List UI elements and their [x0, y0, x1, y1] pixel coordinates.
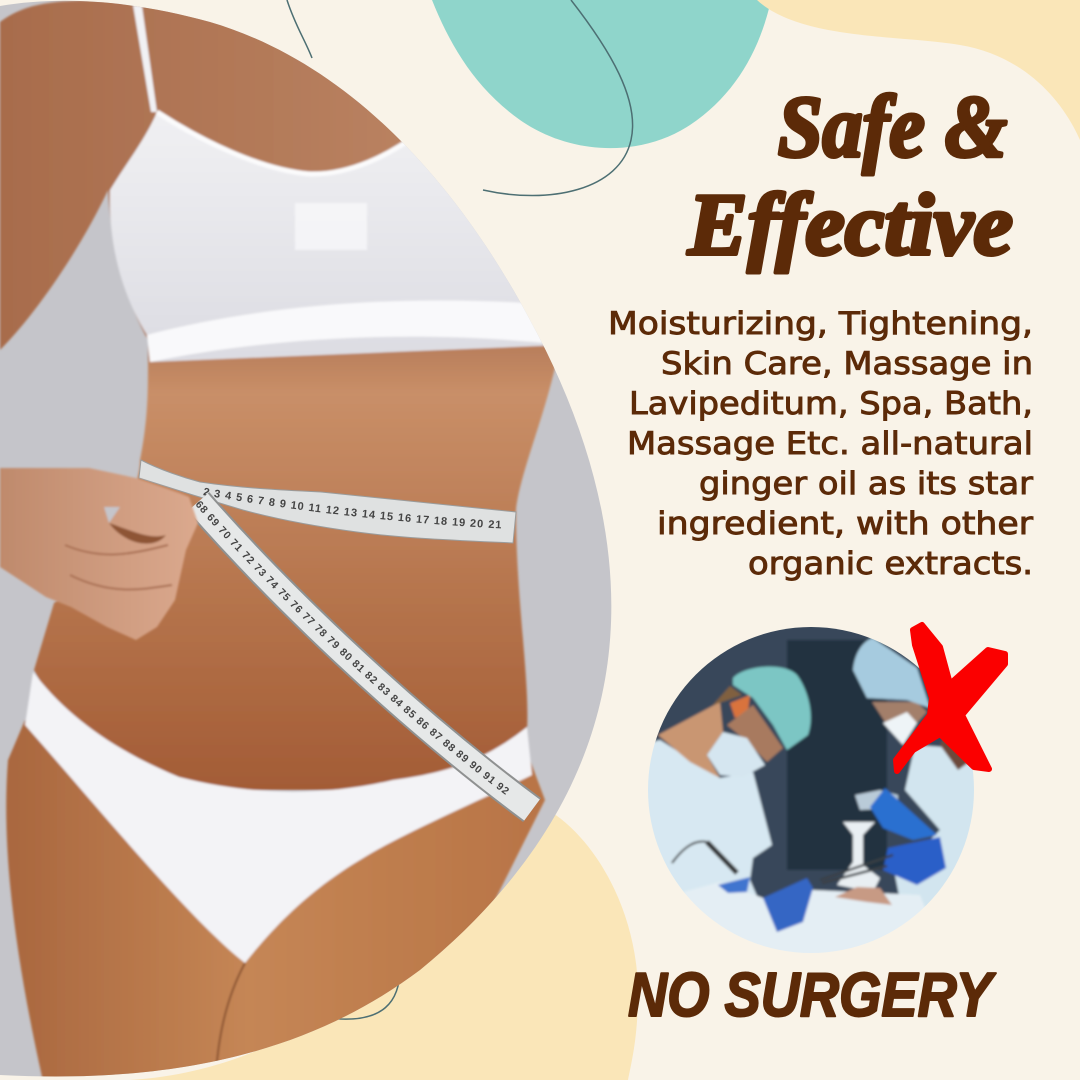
- body text: ingredient, with other: [657, 506, 1033, 542]
- bra neckline trim: [157, 112, 420, 174]
- equipment: [837, 822, 880, 892]
- heading line 1: Safe &: [778, 79, 1007, 176]
- left surgeon neck: [658, 702, 723, 778]
- heading: Safe & Effective: [687, 79, 1013, 274]
- legs skin: [6, 720, 545, 1080]
- diagonal tape numbers: 68 69 70 71 72 73 74 75 76 77 78 79 80 81 82 83 84 85 86 87 88 89 90 91 92: [196, 501, 509, 795]
- surgical tool and cable: [672, 841, 707, 863]
- left surgeon cap: [733, 667, 811, 750]
- torso skin: [34, 340, 560, 790]
- photo: woman with measuring tape: [0, 0, 612, 1076]
- gap between fingers: [104, 507, 120, 523]
- left surgeon mask: [707, 732, 765, 777]
- patient drape: [683, 882, 930, 960]
- shaded palm: [109, 523, 166, 544]
- decorative thin lines: [287, 0, 633, 1019]
- bra strap: [133, 5, 157, 112]
- body text: ginger oil as its star: [699, 466, 1033, 502]
- body text: Moisturizing, Tightening,: [608, 306, 1033, 342]
- oxygen mask top: [855, 790, 898, 810]
- heading line 2: Effective: [687, 177, 1013, 274]
- left surgeon face: [727, 705, 783, 762]
- right surgeon mask: [883, 712, 917, 745]
- body text: Skin Care, Massage in: [661, 346, 1033, 382]
- right surgeon cap: [853, 638, 930, 708]
- right arm edge: [597, 420, 612, 535]
- small blue glove: [718, 877, 750, 893]
- photo background: [0, 0, 640, 1080]
- bra band: [147, 300, 563, 362]
- tape around waist: [138, 459, 516, 544]
- leg crease: [216, 963, 245, 1075]
- right surgeon arm skin: [939, 740, 968, 771]
- forceps: [820, 855, 893, 883]
- left surgeon gown: [648, 738, 774, 896]
- dark door: [787, 640, 887, 870]
- underwear: [25, 672, 532, 963]
- right surgeon face: [872, 702, 927, 723]
- surgery room background: [655, 627, 944, 900]
- body text: [608, 306, 1033, 582]
- surgery scene: [648, 627, 974, 953]
- patient face: [835, 887, 892, 905]
- body text: Massage Etc. all-natural: [627, 426, 1033, 462]
- left surgeon hair: [713, 686, 742, 705]
- bra centre knit: [295, 203, 367, 250]
- bra: [110, 112, 563, 362]
- blue glove upper: [870, 788, 937, 840]
- body shapes: [0, 0, 612, 1080]
- left surgeon ear: [730, 695, 750, 718]
- tape diagonal: [191, 492, 541, 822]
- hand: [0, 468, 198, 640]
- caption: NO SURGERY: NO SURGERY: [628, 961, 997, 1030]
- right surgeon gown: [893, 744, 974, 908]
- palm and fingers: [0, 468, 198, 640]
- surgery photo circle: [648, 627, 974, 953]
- blue glove left: [763, 878, 813, 932]
- shoulder and chest skin: [0, 0, 560, 362]
- body text: Lavipeditum, Spa, Bath,: [629, 386, 1033, 422]
- body text: organic extracts.: [748, 546, 1033, 582]
- icon: red X: [896, 625, 1005, 771]
- blob: yellow bottom: [130, 808, 638, 1080]
- finger creases: [65, 545, 172, 589]
- blob: teal top: [432, 0, 771, 148]
- blue glove lower: [883, 837, 946, 885]
- waist tape numbers: 2 3 4 5 6 7 8 9 10 11 12 13 14 15 16 17 18 19 20 21: [203, 488, 501, 528]
- blob: yellow top right: [757, 0, 1080, 140]
